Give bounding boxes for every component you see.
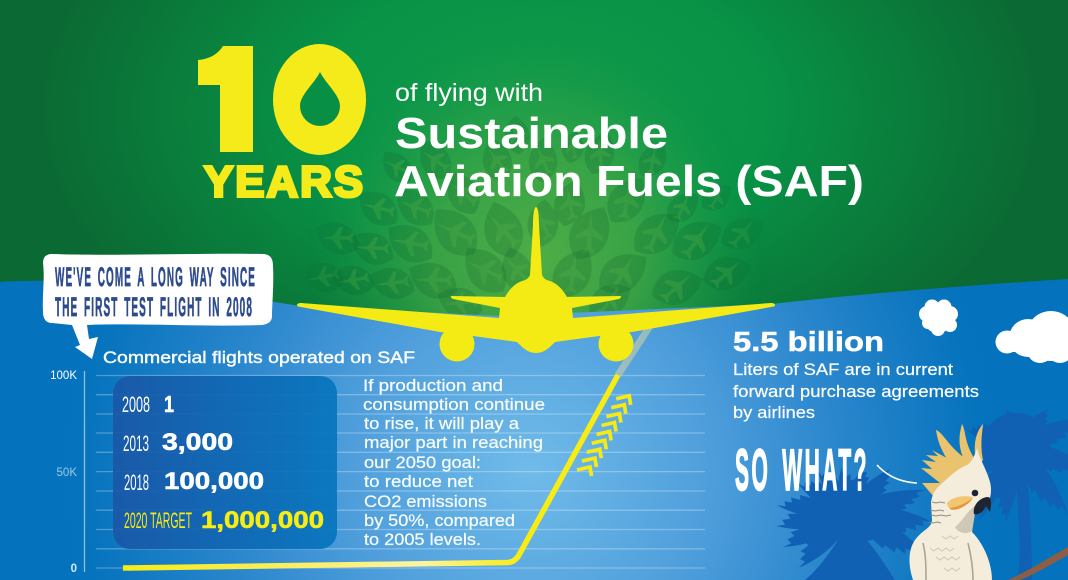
row 2013: [123, 429, 233, 456]
paragraph: 2050 goal: by 50%, compared: [364, 511, 515, 530]
paragraph: 2050 goal: [363, 376, 545, 549]
title text: [394, 79, 864, 206]
row 2018: 100,000: [164, 468, 264, 495]
stat: 5.5 billion: [733, 326, 979, 422]
chart heading: Commercial flights operated on SAF: [103, 349, 415, 367]
growth line: [123, 326, 650, 568]
neck shadow: [955, 505, 976, 533]
infographic canvas: THE FIRST TEST FLIGHT IN 2008: [55, 292, 253, 322]
cockatoo: [909, 424, 992, 580]
wing lines: [923, 543, 973, 580]
grid lines: [96, 376, 705, 568]
title text: of flying with: [395, 79, 543, 107]
paragraph: 2050 goal: to reduce net: [364, 472, 473, 491]
paragraph: 2050 goal: CO2 emissions: [364, 492, 487, 511]
clouds: [919, 300, 1068, 363]
row 2020 target: [124, 507, 324, 534]
cheek shade: [950, 498, 973, 510]
row 2013: 3,000: [162, 429, 233, 456]
eye: [972, 490, 978, 496]
chevron arrows: [577, 396, 631, 476]
axis line: [84, 371, 86, 572]
title number: 10: 1: [221, 32, 252, 178]
paragraph: 2050 goal: consumption continue: [363, 395, 545, 414]
stat: 5.5 billion: Liters of SAF are in current: [733, 360, 953, 379]
feather marks: [930, 536, 960, 571]
palm tree silhouettes: [774, 405, 1068, 580]
leaf pattern with planes: [308, 80, 753, 316]
row 2018: 2018: [124, 470, 149, 495]
paragraph: 2050 goal: If production and: [363, 376, 503, 395]
neck lines: [929, 502, 951, 523]
stat: 5.5 billion: forward purchase agreements: [733, 382, 979, 401]
title number: 10: [198, 31, 366, 178]
row 2008: 2008: [122, 392, 150, 417]
row 2020 target: 2020 TARGET: [124, 508, 192, 533]
axis labels: 100K: [50, 370, 77, 382]
pointer line: [877, 465, 917, 483]
row 2020 target: 1,000,000: [201, 507, 324, 534]
axis labels: 0: [71, 563, 77, 575]
axis labels: [50, 370, 77, 575]
icon: fuel drop: [300, 72, 340, 126]
body: [909, 448, 992, 580]
cheek: [947, 496, 973, 510]
callout bubble: [43, 254, 273, 359]
title: years: YEARS: [204, 158, 365, 206]
title text: Aviation Fuels (SAF): [394, 157, 864, 206]
title number: 10: 0: [284, 31, 355, 177]
axis labels: 50K: [57, 467, 77, 479]
stat: 5.5 billion: 5.5 billion: [733, 326, 884, 357]
title text: Sustainable: [395, 109, 668, 158]
row 2013: 2013: [123, 431, 149, 456]
infographic canvas: WE'VE COME A LONG WAY SINCE: [55, 262, 256, 292]
green header background: [0, 0, 1068, 340]
panel: flight counts: [113, 376, 337, 549]
paragraph: 2050 goal: major part in reaching: [364, 433, 543, 452]
stat: 5.5 billion: by airlines: [733, 403, 815, 422]
paragraph: 2050 goal: to rise, it will play a: [364, 414, 520, 433]
row 2008: 1: [164, 391, 174, 417]
branch: [1008, 547, 1068, 580]
paragraph: 2050 goal: our 2050 goal:: [364, 453, 481, 472]
beak: [974, 497, 991, 514]
paragraph: 2050 goal: to 2005 levels.: [364, 530, 481, 549]
blue sky background: [0, 279, 1068, 580]
plane: [297, 207, 775, 362]
row 2018: [124, 468, 264, 495]
crest: [921, 424, 983, 497]
